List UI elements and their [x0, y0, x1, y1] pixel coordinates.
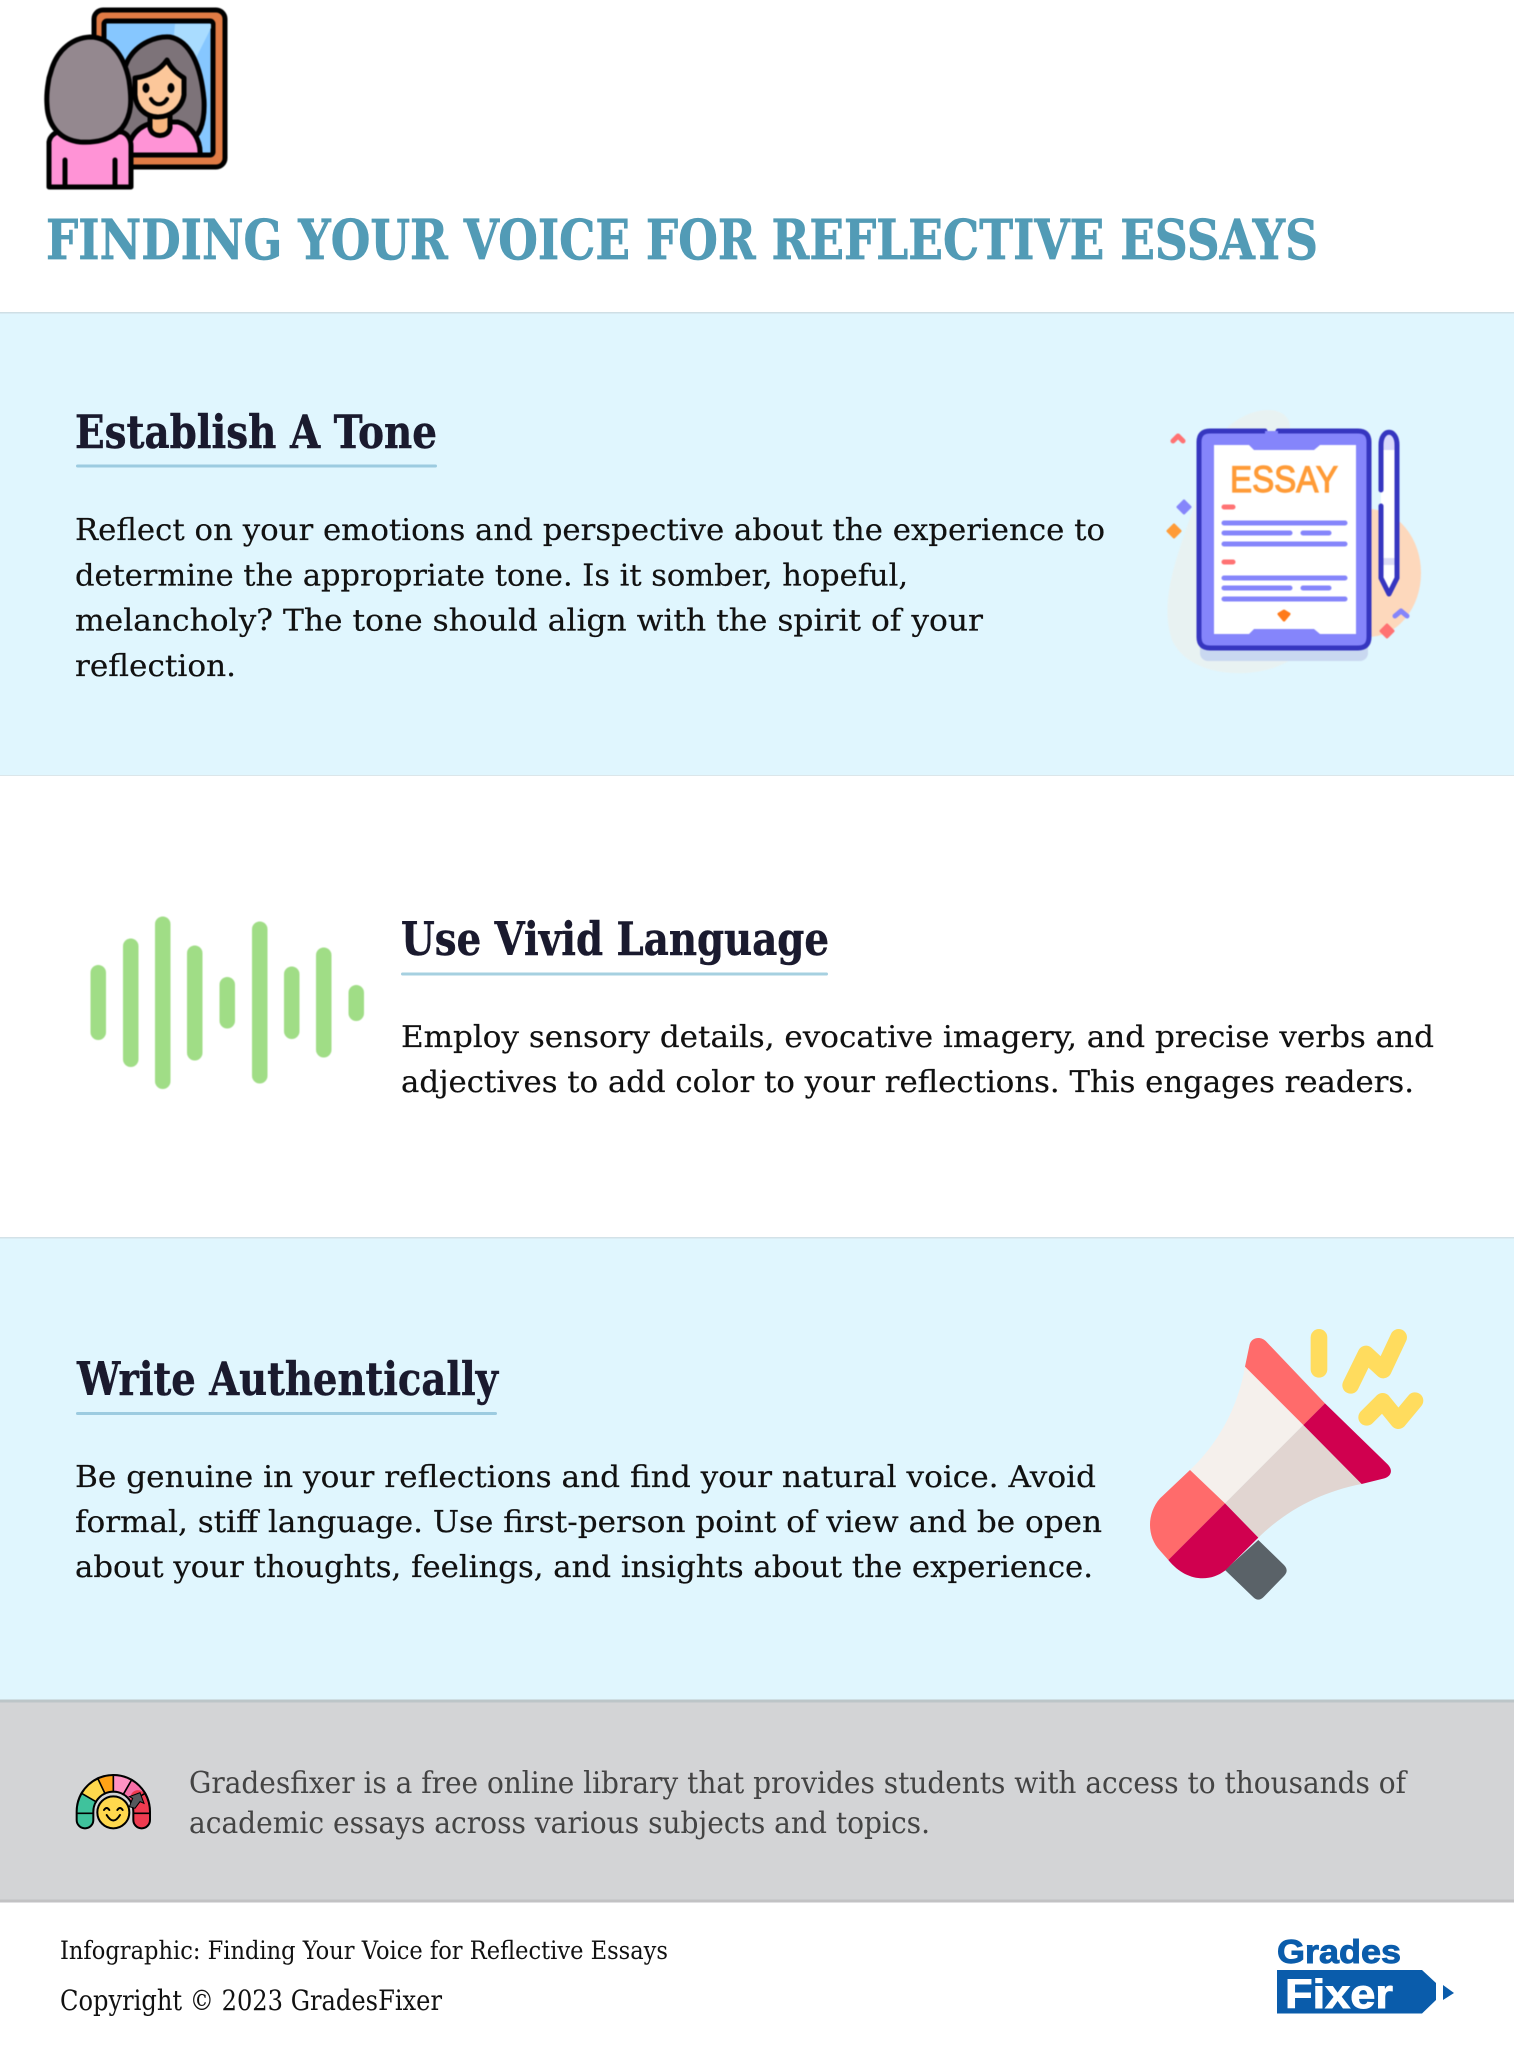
note text — [189, 1766, 1408, 1841]
heading: establish a tone: Establish A Tone — [75, 405, 437, 459]
icon: essay on clipboard with pen — [1167, 410, 1421, 673]
logo: gradesfixer: Grades — [1277, 1933, 1401, 1970]
body text: Reflect on your emotions and perspective about the experience to — [75, 513, 1105, 548]
heading: use vivid language: Use Vivid Language — [401, 912, 829, 966]
copyright: Copyright © 2023 GradesFixer — [60, 1984, 443, 2017]
heading underline — [76, 464, 437, 468]
icon: sound wave bars — [90, 916, 364, 1089]
panel: establish a tone — [0, 312, 1514, 776]
body text: melancholy? The tone should align with the spirit of your — [75, 604, 984, 638]
footer caption: Infographic: Finding Your Voice for Reflective Essays — [60, 1936, 668, 1965]
note text: academic essays across various subjects and topics. — [189, 1806, 930, 1841]
panel: write authentically — [0, 1237, 1514, 1700]
footer — [60, 1933, 1454, 2017]
note text: Gradesfixer is a free online library that provides students with access to thousands of — [189, 1766, 1408, 1801]
heading: write authentically: Write Authentically — [76, 1352, 499, 1406]
icon: essay on clipboard with pen: ESSAY — [1230, 459, 1338, 500]
body text: adjectives to add color to your reflections. This engages readers. — [401, 1065, 1414, 1100]
body text — [75, 1460, 1102, 1585]
body text: formal, stiff language. Use first-person point of view and be open — [75, 1505, 1102, 1540]
header — [46, 10, 1318, 272]
body text: Employ sensory details, evocative imagery, and precise verbs and — [401, 1020, 1434, 1055]
body text: about your thoughts, feelings, and insights about the experience. — [75, 1550, 1093, 1585]
logo: gradesfixer: Fixer — [1285, 1971, 1393, 2017]
logo: gradesfixer — [1277, 1933, 1454, 2017]
body text: reflection. — [75, 649, 236, 684]
icon: woman looking in mirror — [47, 10, 225, 187]
heading underline — [76, 1412, 497, 1415]
body text: Be genuine in your reflections and find your natural voice. Avoid — [75, 1460, 1096, 1495]
body text — [401, 1020, 1434, 1100]
icon: mood gauge — [77, 1774, 150, 1828]
panel: use vivid language — [0, 776, 1514, 1237]
icon: megaphone — [1150, 1337, 1415, 1600]
body text: determine the appropriate tone. Is it somber, hopeful, — [75, 558, 908, 594]
body text — [75, 513, 1105, 684]
panel: gradesfixer note — [0, 1700, 1514, 1902]
heading underline — [401, 972, 828, 976]
